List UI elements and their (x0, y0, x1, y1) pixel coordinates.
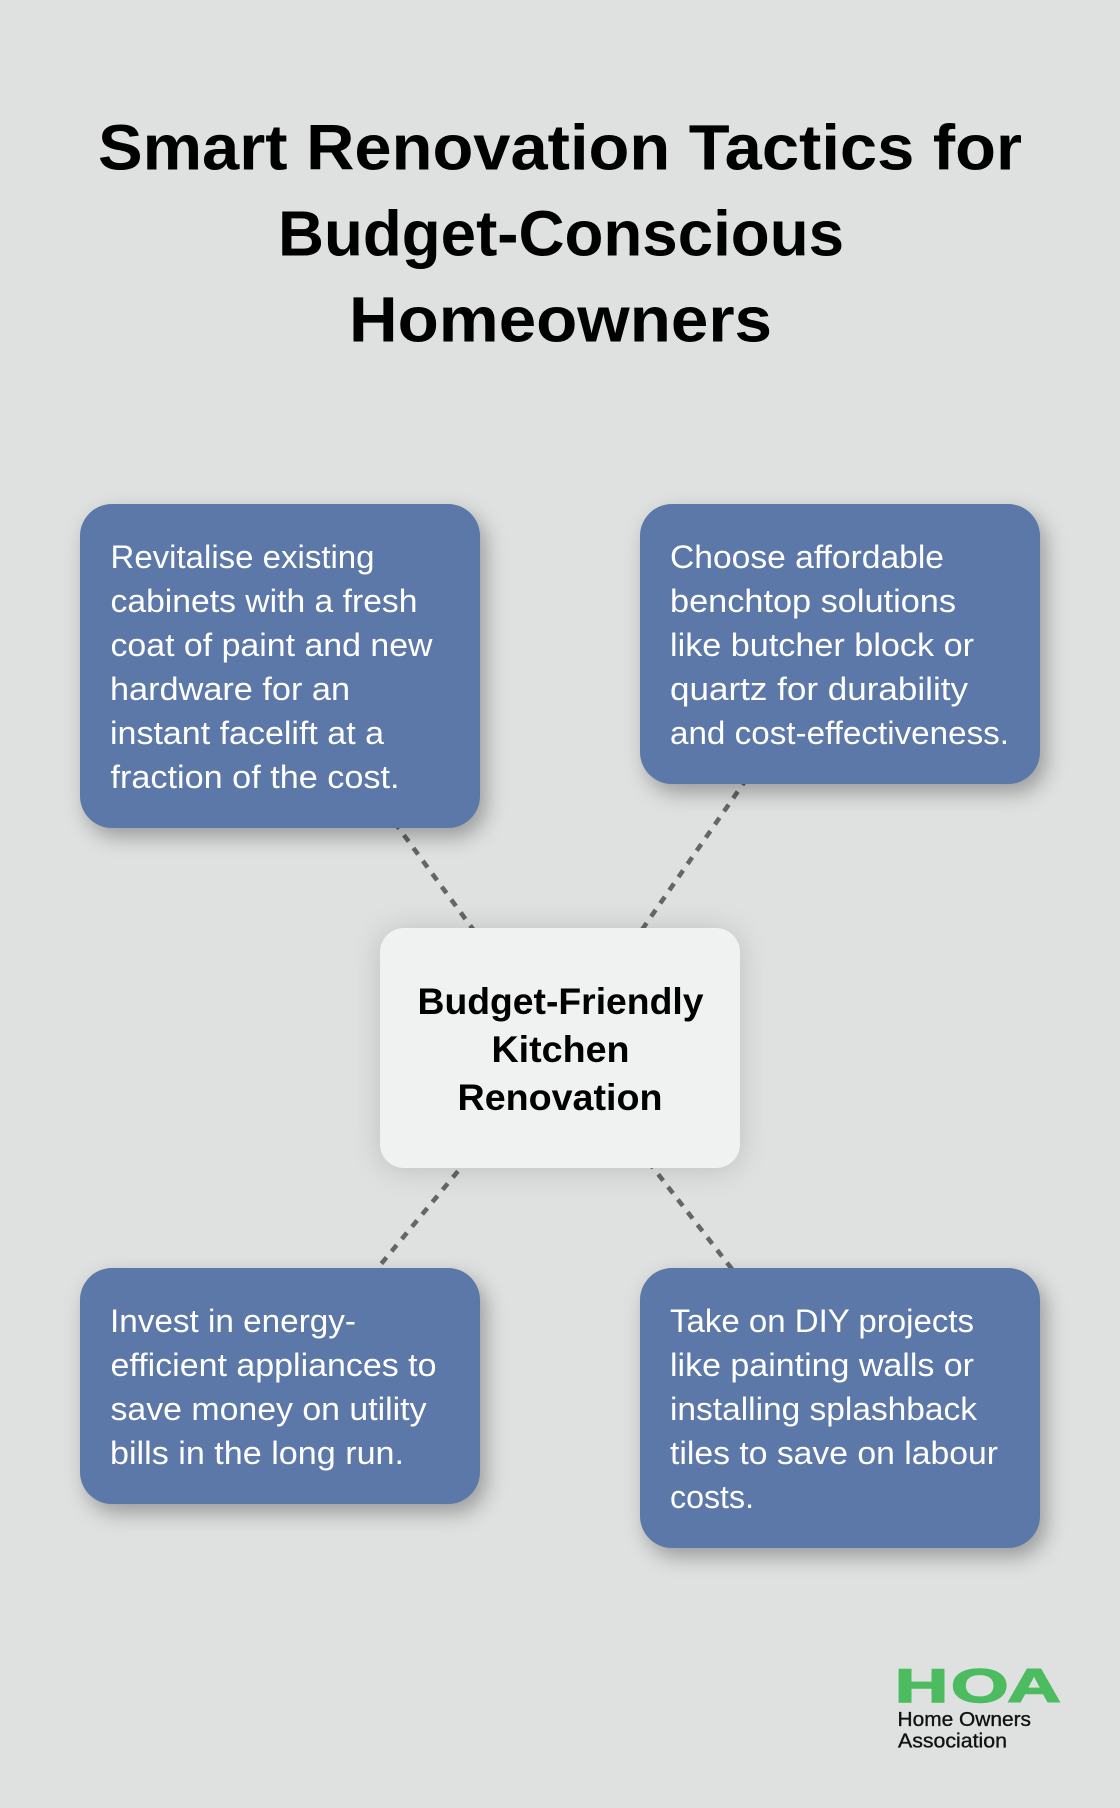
panel: cabinets tip: cabinets with a fresh (110, 583, 418, 619)
logo: HOA: HOA (895, 1660, 1061, 1713)
panel: cabinets tip: hardware for an (110, 671, 350, 707)
panel: benchtop tip: like butcher block or (670, 627, 974, 663)
panel: benchtop tip: quartz for durability (670, 671, 968, 707)
panel: central hub (380, 928, 740, 1168)
logo: HOA: Association (898, 1730, 1007, 1752)
panel: appliances tip: save money on utility (110, 1391, 426, 1427)
logo: HOA (895, 1660, 1061, 1752)
panel: appliances tip: bills in the long run. (110, 1435, 404, 1471)
panel: central hub: Kitchen (492, 1028, 630, 1070)
panel: DIY tip (640, 1268, 1040, 1548)
dashed connectors from hub to cards (280, 644, 840, 1408)
title: Homeowners (349, 284, 772, 356)
panel: cabinets tip (80, 504, 480, 828)
panel: DIY tip: tiles to save on labour (670, 1435, 998, 1471)
panel: benchtop tip (640, 504, 1040, 784)
title: Budget-Conscious (278, 198, 844, 270)
panel: appliances tip: efficient appliances to (110, 1347, 436, 1383)
panel: DIY tip: like painting walls or (670, 1347, 974, 1383)
panel: central hub: Renovation (458, 1076, 662, 1118)
title: Smart Renovation Tactics for (98, 112, 1022, 184)
panel: central hub: Budget-Friendly (418, 980, 704, 1022)
panel: benchtop tip: Choose affordable (670, 539, 944, 575)
panel: DIY tip: installing splashback (670, 1391, 978, 1427)
panel: DIY tip: Take on DIY projects (670, 1303, 974, 1339)
panel: benchtop tip: benchtop solutions (670, 583, 956, 619)
panel: appliances tip: Invest in energy- (110, 1303, 356, 1339)
panel: cabinets tip: instant facelift at a (110, 715, 384, 751)
title (98, 112, 1022, 356)
panel: DIY tip: costs. (670, 1479, 754, 1515)
panel: benchtop tip: and cost-effectiveness. (670, 715, 1009, 751)
panel: cabinets tip: fraction of the cost. (110, 759, 400, 795)
panel: cabinets tip: coat of paint and new (110, 627, 433, 663)
panel: cabinets tip: Revitalise existing (110, 539, 374, 575)
logo: HOA: Home Owners (898, 1709, 1031, 1731)
panel: appliances tip (80, 1268, 480, 1504)
